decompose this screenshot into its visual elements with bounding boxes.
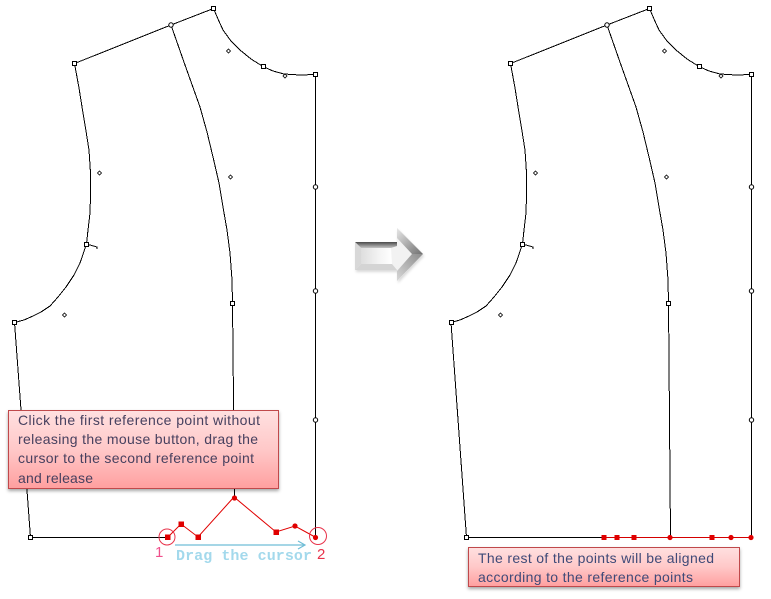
dart tick bbox=[522, 244, 533, 249]
side seam bbox=[451, 322, 604, 538]
left pattern piece bbox=[12, 6, 318, 540]
callout: drag instructions: Click the first reference point without bbox=[18, 412, 260, 428]
armhole curve bbox=[14, 64, 90, 322]
neckline curve bbox=[650, 8, 752, 75]
line circle points bbox=[605, 23, 754, 422]
neckline curve bbox=[214, 8, 316, 75]
pattern square points bbox=[450, 6, 754, 540]
side seam bbox=[14, 322, 168, 538]
callout: drag instructions: cursor to the second reference point bbox=[18, 450, 254, 466]
arrow between states bbox=[355, 228, 423, 281]
armhole curve bbox=[451, 64, 526, 322]
aligned red points bbox=[602, 535, 754, 540]
dart tick bbox=[86, 244, 97, 249]
callout: alignment result: The rest of the points will be aligned bbox=[478, 550, 714, 566]
control point diamonds bbox=[498, 49, 723, 317]
callout: drag instructions: and release bbox=[18, 470, 93, 486]
princess seam bbox=[171, 25, 234, 497]
callout: drag instructions: releasing the mouse button, drag the bbox=[18, 431, 258, 447]
centre front line bbox=[314, 74, 316, 537]
reference point marker 1 bbox=[155, 529, 175, 561]
shoulder line bbox=[510, 8, 650, 64]
callout: alignment result bbox=[468, 548, 740, 586]
drag the cursor label: Drag the cursor bbox=[176, 548, 312, 565]
drag arrow bbox=[175, 541, 305, 549]
right pattern piece bbox=[450, 6, 754, 540]
control point diamonds bbox=[62, 49, 287, 317]
red selected points zigzag bbox=[165, 495, 318, 540]
princess seam bbox=[607, 25, 670, 537]
line circle points bbox=[169, 23, 318, 422]
callout: drag instructions bbox=[8, 410, 278, 488]
callout: alignment result: according to the reference points bbox=[478, 569, 693, 585]
reference point marker 2: 2 bbox=[317, 546, 325, 563]
centre front line bbox=[750, 74, 752, 537]
reference point marker 1: 1 bbox=[155, 544, 163, 561]
pattern square points bbox=[12, 6, 318, 540]
reference point marker 2 bbox=[310, 528, 326, 563]
shoulder line bbox=[74, 8, 214, 64]
